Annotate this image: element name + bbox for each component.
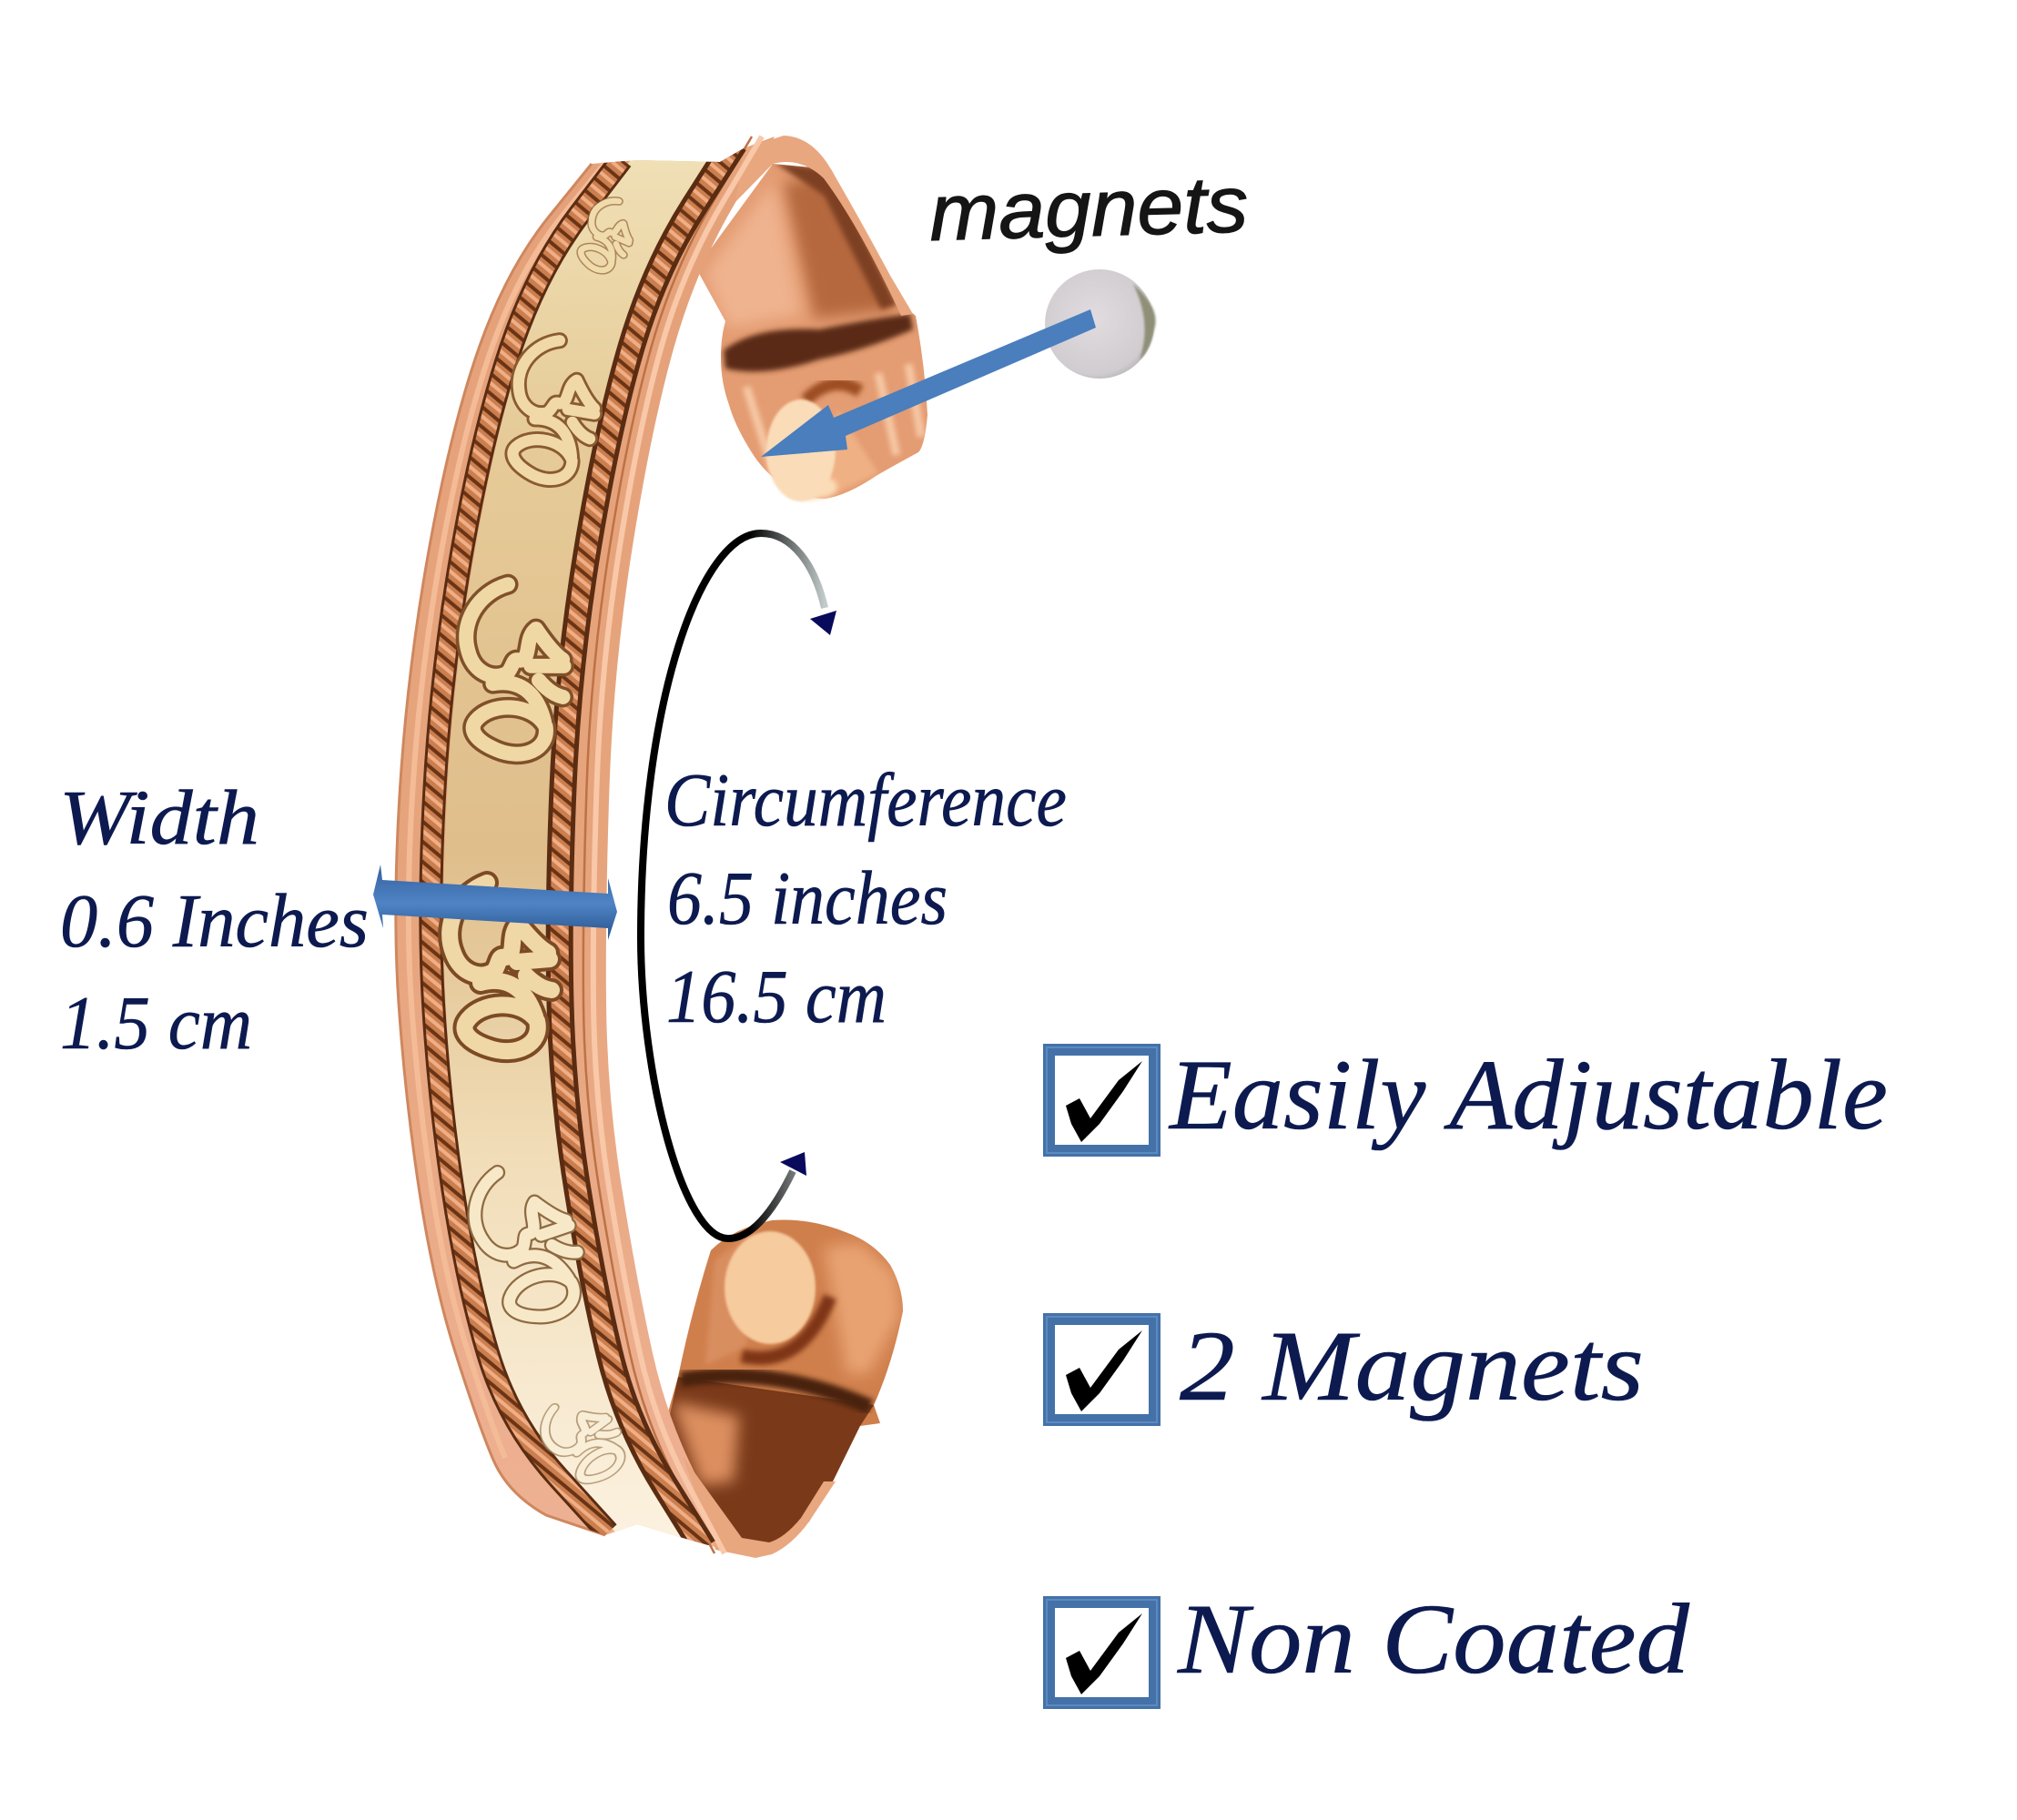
checkbox icon xyxy=(1047,1600,1157,1705)
width text: 1.5 cm xyxy=(60,981,252,1066)
feature: 2 magnets: 2 Magnets xyxy=(1180,1310,1644,1421)
om emblem 5 xyxy=(465,1158,591,1328)
feature: non coated: Non Coated xyxy=(1177,1583,1690,1694)
rope twist left xyxy=(431,159,622,1532)
top rim wrap xyxy=(735,136,913,316)
arrow: magnet to cuff end xyxy=(761,309,1096,457)
circumference text xyxy=(664,758,1067,1039)
om emblem 3 xyxy=(456,581,573,758)
central cream strip xyxy=(443,144,724,1546)
bottom rim wrap xyxy=(683,1456,836,1558)
om emblem 6 xyxy=(534,1387,633,1491)
width double arrow xyxy=(373,864,617,940)
arrowhead top xyxy=(810,611,836,635)
om emblem 1 xyxy=(571,194,644,278)
main band copper rim xyxy=(396,136,775,1553)
magnets label: magnets xyxy=(928,158,1249,258)
arrowhead bottom xyxy=(780,1152,806,1176)
om emblem 4 xyxy=(450,883,552,1051)
circumference text: Circumference xyxy=(664,758,1067,843)
magnet disc xyxy=(1045,269,1156,379)
bracelet xyxy=(396,136,927,1558)
circumference curve arrow xyxy=(641,533,836,1239)
rim highlights xyxy=(396,136,762,1553)
circumference text: 6.5 inches xyxy=(667,856,948,941)
width text xyxy=(59,774,369,1066)
feature: non coated xyxy=(1047,1583,1690,1705)
om emblem 2 xyxy=(497,333,611,488)
width text: Width xyxy=(59,774,259,861)
feature: easily adjustable: Easily Adjustable xyxy=(1168,1039,1888,1150)
circumference text: 16.5 cm xyxy=(666,955,887,1039)
feature: 2 magnets xyxy=(1047,1310,1644,1422)
bottom inner end of cuff xyxy=(666,1220,903,1554)
rope twist right xyxy=(560,143,735,1548)
top inner end of cuff xyxy=(696,162,927,501)
checkbox icon xyxy=(1047,1317,1157,1422)
width text: 0.6 Inches xyxy=(60,879,369,964)
infographic canvas xyxy=(62,135,1886,1709)
checkbox icon xyxy=(1047,1047,1157,1153)
